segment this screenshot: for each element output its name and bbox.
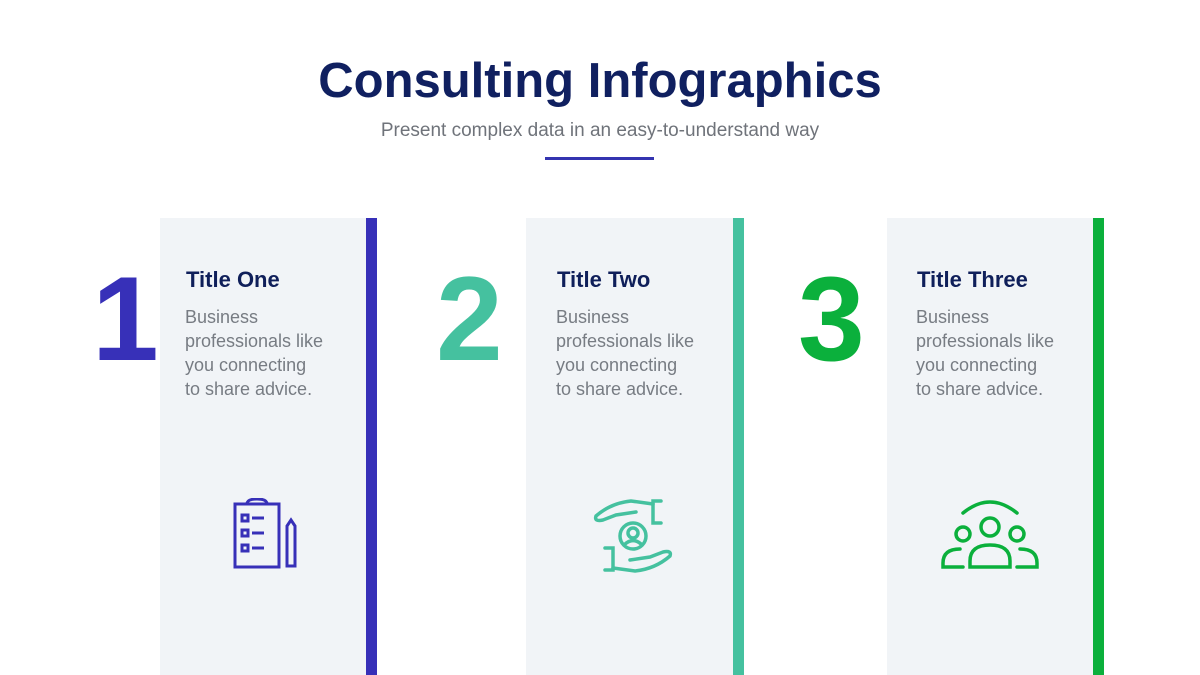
text one: professionals like (185, 331, 323, 351)
text three: Business (916, 307, 989, 327)
text two: you connecting (556, 355, 677, 375)
icon: hands with person (594, 499, 672, 573)
text three: professionals like (916, 331, 1054, 351)
icon: group (941, 500, 1039, 569)
text three: you connecting (916, 355, 1037, 375)
subtitle: Present complex data in an easy-to-understand way (381, 120, 819, 141)
number 2: 2 (436, 252, 503, 386)
text one: to share advice. (185, 379, 312, 399)
text two: Business (556, 307, 629, 327)
text two (556, 307, 694, 399)
number 3: 3 (798, 252, 865, 386)
panel: three (798, 218, 1104, 675)
panel: one (92, 218, 377, 675)
text one: Business (185, 307, 258, 327)
text one: you connecting (185, 355, 306, 375)
title: Consulting Infographics (318, 54, 882, 108)
icon: clipboard (234, 498, 296, 568)
text two: to share advice. (556, 379, 683, 399)
heading three: Title Three (917, 267, 1028, 292)
heading one: Title One (186, 267, 280, 292)
panel: two (436, 218, 744, 675)
text one (185, 307, 323, 399)
heading two: Title Two (557, 267, 650, 292)
number 1: 1 (92, 252, 159, 386)
text three (916, 307, 1054, 399)
text three: to share advice. (916, 379, 1043, 399)
title underline (545, 157, 654, 160)
text two: professionals like (556, 331, 694, 351)
